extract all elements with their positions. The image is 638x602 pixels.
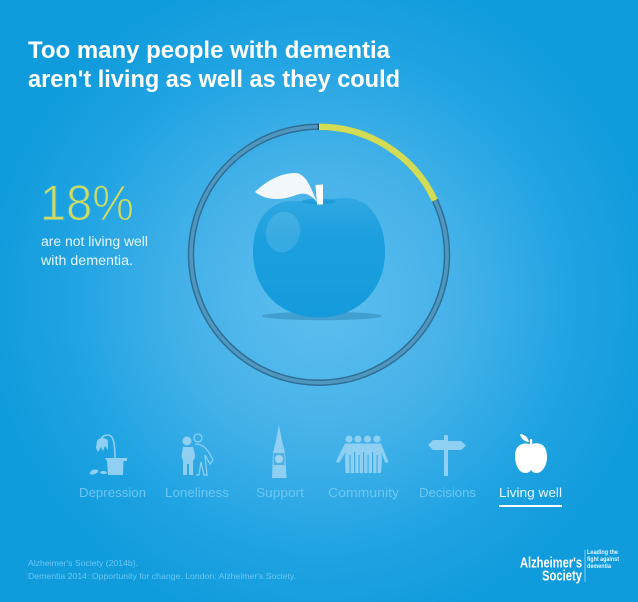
- title: aren't living as well as they could: [28, 66, 400, 93]
- logo: Alzheimer's Society: Leading the: [587, 549, 618, 556]
- nav item: loneliness: [165, 434, 230, 500]
- active underline: [499, 505, 562, 507]
- title: [28, 37, 400, 93]
- logo: Alzheimer's Society: Society: [542, 568, 582, 584]
- statistic description: [40, 234, 148, 268]
- statistic: 18%: 18%: [40, 175, 134, 231]
- label: Decisions: [419, 485, 477, 500]
- apple body: [253, 198, 385, 318]
- nav item: decisions: [419, 435, 477, 500]
- statistic description: are not living well: [41, 234, 148, 249]
- logo: Alzheimer's Society: Alzheimer's: [520, 556, 582, 572]
- logo: Alzheimer's Society: dementia: [587, 563, 611, 570]
- icon: clock tower: [272, 425, 286, 478]
- apple stem: [316, 184, 323, 204]
- label: Living well: [499, 485, 562, 500]
- apple shadow: [262, 312, 382, 320]
- ring track: [191, 127, 447, 383]
- icon: two people: [182, 434, 213, 475]
- nav item: support: [256, 425, 304, 500]
- ring highlighted arc: [319, 127, 435, 200]
- label: Support: [256, 485, 304, 500]
- apple illustration: [253, 173, 385, 320]
- label: Loneliness: [165, 485, 230, 500]
- nav item: living well (active): [499, 434, 562, 507]
- icon: drooping flower: [89, 435, 127, 476]
- icon: signpost: [428, 435, 466, 476]
- nav item: depression: [79, 435, 146, 500]
- navigation icons row: [79, 425, 562, 507]
- statistic description: with dementia.: [40, 253, 133, 268]
- icon: group of people: [336, 436, 388, 474]
- ring chart: 18 percent: [191, 124, 447, 383]
- citation: Dementia 2014: Opportunity for change. London: Alzheimer's Society.: [28, 571, 296, 581]
- logo: Alzheimer's Society: fight against: [587, 556, 620, 563]
- citation: [28, 558, 296, 581]
- logo: Alzheimer's Society: [520, 549, 620, 584]
- label: Community: [328, 485, 400, 500]
- label: Depression: [79, 485, 146, 500]
- apple highlight: [262, 208, 304, 256]
- apple leaf: [255, 173, 317, 202]
- apple stem dip: [302, 198, 336, 204]
- title: Too many people with dementia: [28, 37, 391, 64]
- nav item: community: [328, 436, 400, 500]
- icon: white apple: [515, 434, 547, 473]
- citation: Alzheimer's Society (2014b).: [28, 558, 138, 568]
